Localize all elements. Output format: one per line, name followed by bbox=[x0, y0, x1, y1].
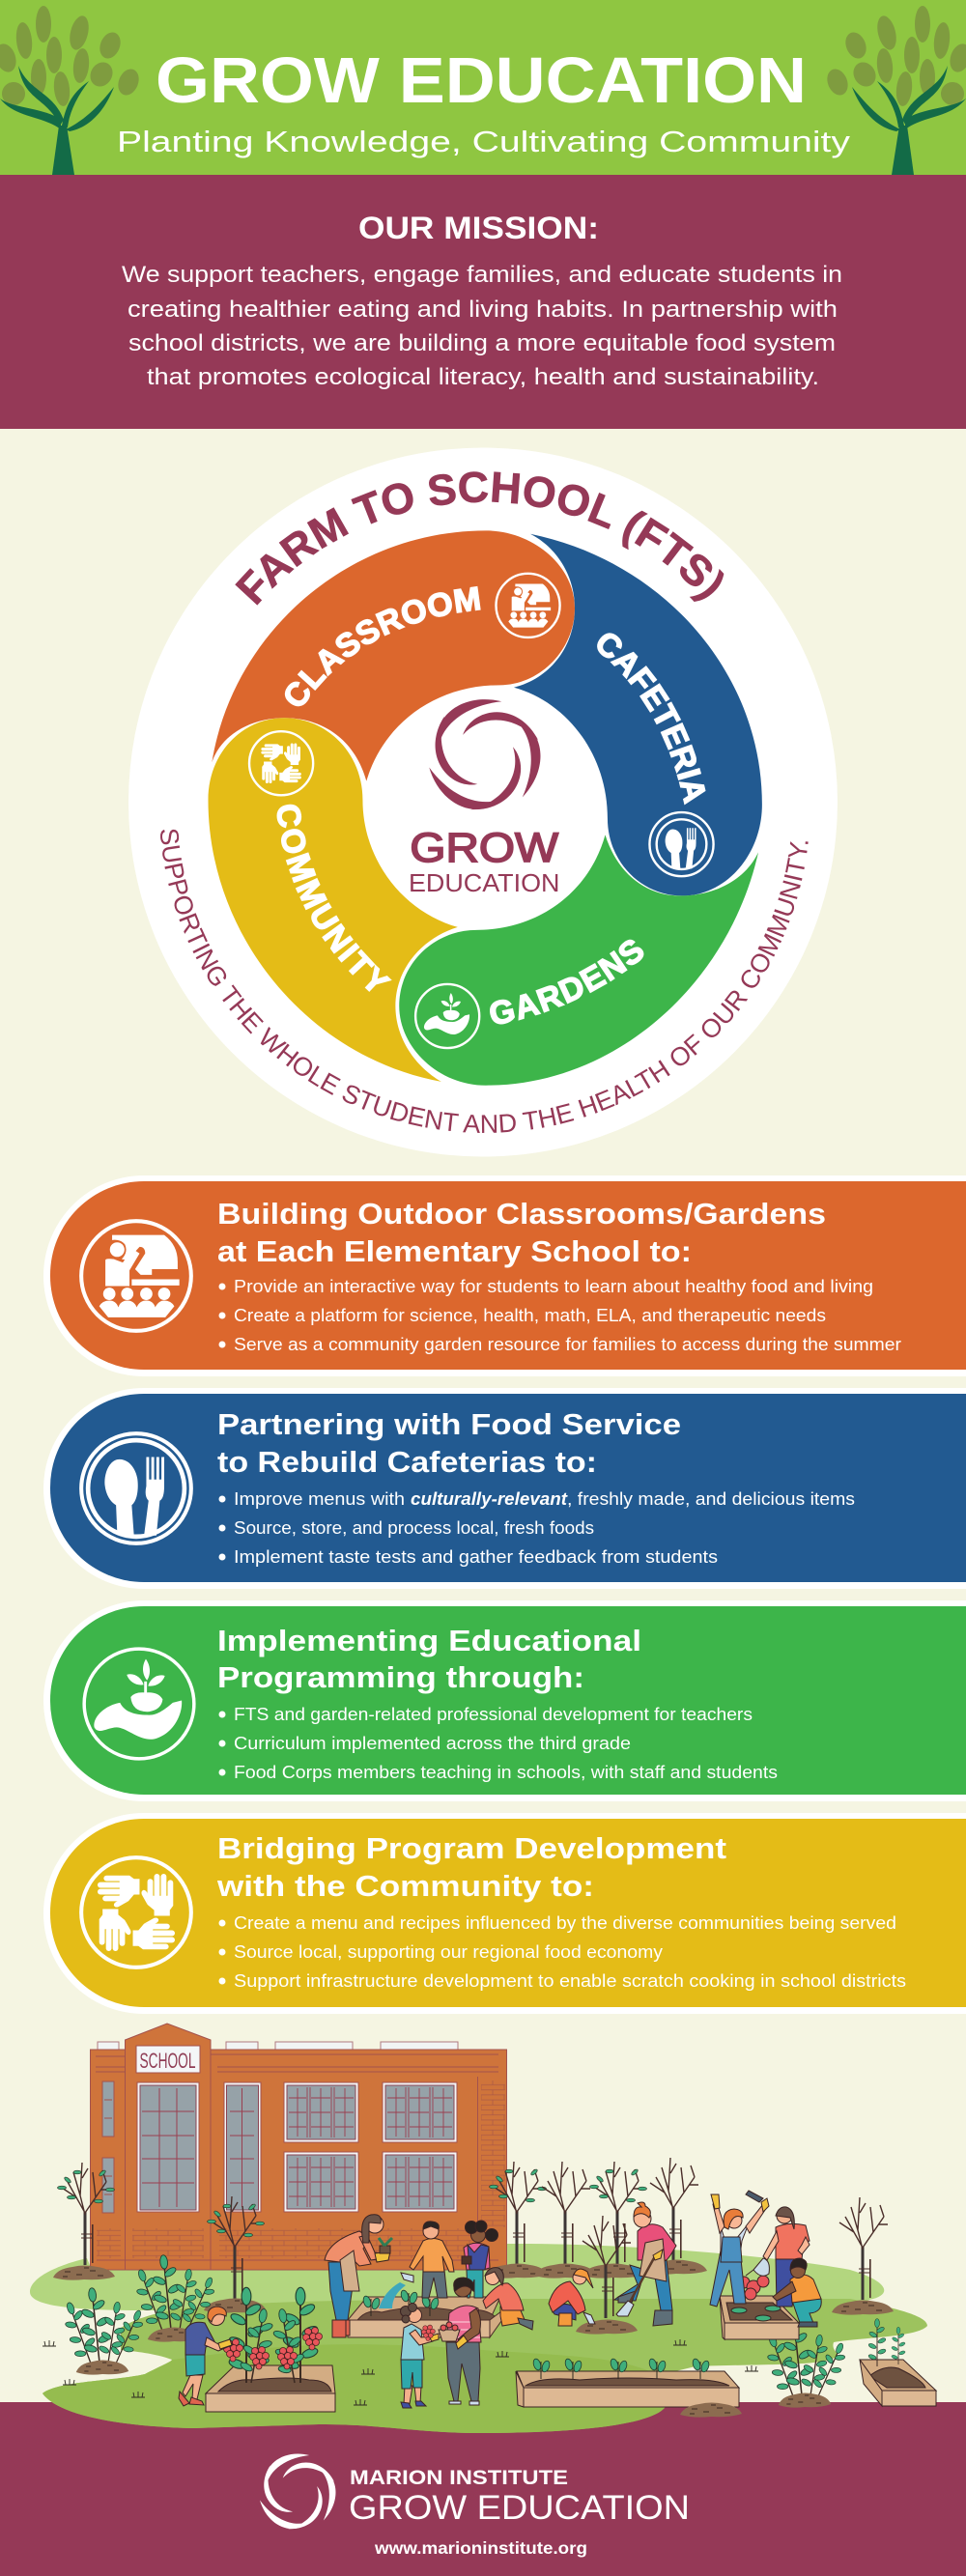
icon: teacher and students bbox=[81, 1221, 191, 1331]
icon: spoon and fork bbox=[81, 1433, 191, 1543]
person: woman with potted plant bbox=[325, 2215, 392, 2337]
segment: gardens bbox=[399, 835, 758, 1086]
icon: seedling in hand bbox=[84, 1649, 194, 1759]
title: GROW EDUCATION bbox=[156, 44, 807, 117]
heading: Implementing Educational bbox=[217, 1624, 641, 1657]
segment: classroom bbox=[212, 530, 575, 780]
website: www.marioninstitute.org bbox=[374, 2538, 587, 2558]
person: woman with shovel bbox=[614, 2202, 676, 2326]
bullet list: Implement taste tests and gather feedback from students bbox=[234, 1547, 718, 1567]
segment: classroom: CLASSROOM bbox=[284, 585, 481, 707]
bullet list: Serve as a community garden resource for families to access during the summer bbox=[234, 1335, 901, 1354]
illustration: lawn bbox=[30, 2244, 927, 2433]
heading bbox=[217, 1407, 681, 1479]
bullet list: Support infrastructure development to enable scratch cooking in school districts bbox=[234, 1971, 906, 1991]
bullet list bbox=[218, 1705, 778, 1782]
bullet list: Provide an interactive way for students to learn about healthy food and living bbox=[234, 1277, 873, 1296]
flower bed bbox=[720, 2276, 799, 2339]
mission text: school districts, we are building a more equitable food system bbox=[128, 330, 836, 356]
person: crouching child bbox=[549, 2269, 595, 2326]
person: woman watering flowers bbox=[746, 2207, 810, 2307]
segment: community: COMMUNITY bbox=[276, 804, 392, 992]
raised bed with raspberries (front left) bbox=[206, 2287, 335, 2412]
arc tagline: SUPPORTING THE WHOLE STUDENT AND THE HEALTH OF OUR COMMUNITY. bbox=[160, 829, 809, 1133]
person: crouching boy in orange bbox=[773, 2258, 821, 2327]
segment: cafeteria: CAFETERIA bbox=[597, 633, 705, 806]
person: boy in blue bbox=[179, 2307, 232, 2406]
center logo bbox=[409, 699, 559, 897]
panel: community development bbox=[43, 1813, 966, 2014]
heading: Bridging Program Development bbox=[217, 1831, 726, 1865]
heading: Programming through: bbox=[217, 1660, 584, 1694]
heading: with the Community to: bbox=[216, 1869, 594, 1903]
bullet list: Curriculum implemented across the third grade bbox=[234, 1734, 631, 1753]
brickwork bbox=[97, 2081, 505, 2258]
arc heading: FARM TO SCHOOL (FTS) bbox=[235, 471, 724, 606]
bullet list: , freshly made, and delicious items bbox=[567, 1489, 855, 1509]
bullet list bbox=[218, 1489, 855, 1567]
heading bbox=[216, 1831, 726, 1903]
mission text bbox=[122, 262, 842, 390]
illustration: trees bbox=[53, 2158, 894, 2335]
person: woman with basket bbox=[439, 2278, 481, 2405]
bullet list: Food Corps members teaching in schools, with staff and students bbox=[234, 1763, 778, 1782]
illustration: front mound on footer bbox=[680, 2403, 742, 2418]
bullet list: Source local, supporting our regional food economy bbox=[234, 1942, 663, 1962]
person: kneeling girl bbox=[483, 2268, 533, 2330]
mission text: that promotes ecological literacy, health and sustainability. bbox=[147, 364, 819, 390]
bullet list: FTS and garden-related professional development for teachers bbox=[234, 1705, 753, 1724]
person: boy watering bbox=[379, 2222, 454, 2308]
heading: to Rebuild Cafeterias to: bbox=[217, 1445, 597, 1479]
center logo: GROW bbox=[410, 825, 558, 870]
school sign: SCHOOL bbox=[139, 2049, 195, 2073]
mission heading: OUR MISSION: bbox=[358, 211, 599, 245]
subtitle: Planting Knowledge, Cultivating Community bbox=[117, 125, 851, 158]
bullet list: Create a menu and recipes influenced by the diverse communities being served bbox=[234, 1913, 896, 1933]
bullet list bbox=[218, 1277, 901, 1354]
segment: gardens: GARDENS bbox=[490, 939, 643, 1024]
mission text: creating healthier eating and living habits. In partnership with bbox=[128, 297, 838, 323]
panel: educational programming bbox=[43, 1600, 966, 1801]
person: cheering girl bbox=[710, 2191, 769, 2307]
illustration: raised bed with sprouts (back) bbox=[348, 2289, 501, 2337]
center logo: EDUCATION bbox=[409, 870, 559, 897]
segment: community bbox=[209, 718, 458, 1082]
person: girl with afro puffs bbox=[462, 2221, 498, 2298]
heading: Partnering with Food Service bbox=[217, 1407, 681, 1441]
bullet list bbox=[218, 1913, 906, 1991]
diagram: farm to school wheel bbox=[128, 448, 838, 1157]
panel: outdoor classrooms bbox=[43, 1175, 966, 1376]
icon: left tree bbox=[0, 6, 143, 175]
illustration: shrubs bbox=[57, 2253, 852, 2408]
organisation name: MARION INSTITUTE bbox=[350, 2467, 568, 2489]
heading bbox=[217, 1624, 641, 1694]
icon: four hands bbox=[81, 1857, 191, 1967]
raised bed with long planting bbox=[516, 2358, 739, 2407]
mission text: We support teachers, engage families, and educate students in bbox=[122, 262, 842, 288]
windows bbox=[102, 2081, 457, 2213]
icon: right tree bbox=[823, 6, 966, 175]
small raised bed right bbox=[860, 2319, 936, 2406]
header banner bbox=[0, 0, 966, 175]
heading: at Each Elementary School to: bbox=[217, 1234, 692, 1268]
heading bbox=[217, 1197, 826, 1268]
school sign bbox=[136, 2046, 200, 2073]
illustration: school building bbox=[91, 2024, 506, 2270]
footer band bbox=[0, 2402, 966, 2576]
segment: cafeteria bbox=[514, 533, 762, 896]
icon: swirl bbox=[246, 2454, 347, 2543]
panel: our mission bbox=[0, 175, 966, 429]
bullet list: Improve menus with bbox=[234, 1489, 405, 1509]
bullet list: culturally-relevant bbox=[411, 1489, 568, 1509]
bullet list: Source, store, and process local, fresh foods bbox=[234, 1518, 594, 1538]
panel: food service bbox=[43, 1388, 966, 1589]
heading: Building Outdoor Classrooms/Gardens bbox=[217, 1197, 826, 1231]
bullet list: Create a platform for science, health, math, ELA, and therapeutic needs bbox=[234, 1306, 826, 1325]
person: girl in teal bbox=[400, 2303, 439, 2408]
footer logo bbox=[246, 2454, 690, 2558]
programme name: GROW EDUCATION bbox=[349, 2489, 690, 2527]
skylights bbox=[98, 2042, 458, 2050]
